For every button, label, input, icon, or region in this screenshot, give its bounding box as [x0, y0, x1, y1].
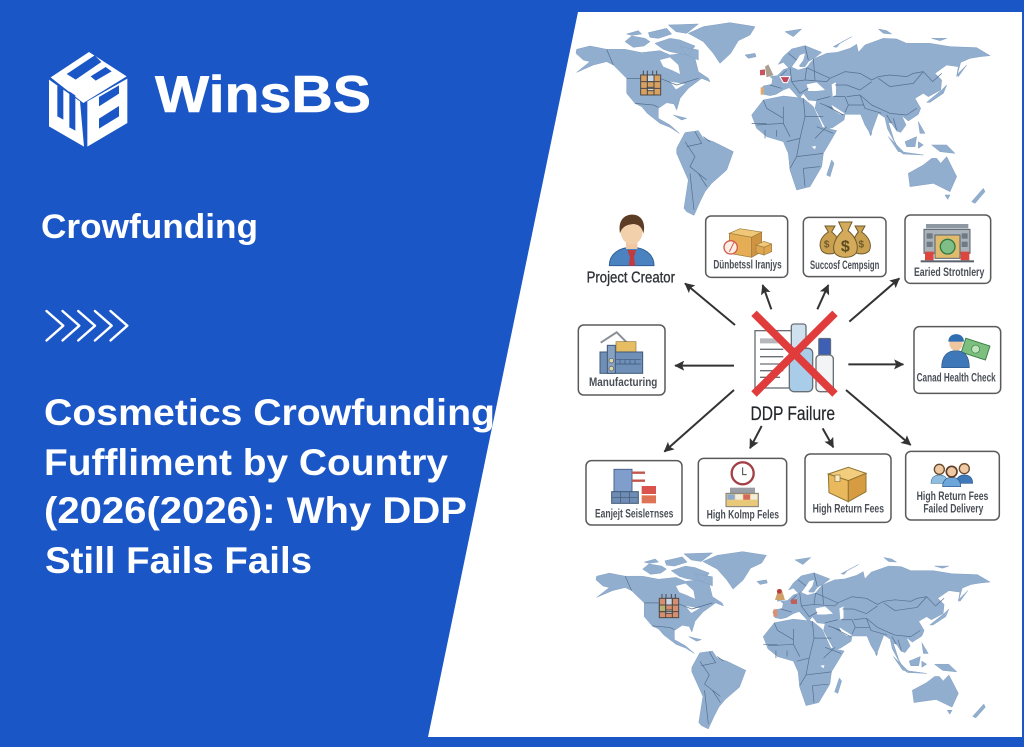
box: successful campaign: $: [841, 239, 850, 256]
icon: center cosmetics with red X: [754, 313, 835, 394]
box: high return fees: [805, 454, 891, 522]
arrow: to strategy: [849, 278, 899, 322]
box: successful campaign: Succosf Cempsign: [810, 259, 879, 272]
arrow: to box one: [664, 390, 734, 452]
panel: white slanted panel: [428, 12, 1022, 737]
headline: (2026(2026): Why DDP: [44, 490, 467, 531]
arrow: to box two: [750, 426, 762, 448]
box: earlier strategy: [905, 215, 991, 283]
box: canada health check: [914, 327, 1001, 393]
box: manufacturing: Manufacturing: [589, 376, 657, 389]
box: manufacturing: [578, 325, 665, 395]
map: top world map: [576, 23, 990, 215]
diagram: upper half: [578, 215, 1001, 395]
box: high customs fees: High Kolmp Feles: [707, 509, 779, 522]
arrow: to box four: [846, 390, 911, 445]
label: DDP failure: DDP Failure: [750, 404, 835, 425]
map: bottom world map: [596, 552, 990, 729]
box: successful campaign: $: [859, 240, 865, 251]
label: project creator: Project Creator: [587, 270, 675, 287]
arrow: to campaign: [817, 285, 828, 309]
box: earlier sales: [586, 461, 682, 525]
icon: bottom map markers: [659, 589, 797, 618]
box: successful campaign: [803, 217, 886, 277]
box: failed delivery: [906, 451, 999, 520]
icon: chevrons: [46, 311, 127, 340]
icon: project creator: [609, 215, 654, 266]
box: failed delivery: High Return Fees: [917, 490, 988, 503]
headline: Fuffliment by Country: [44, 442, 448, 483]
arrow: to shipments: [763, 285, 771, 309]
box: successful campaign: $: [824, 240, 830, 251]
category label: Crowfunding: [41, 208, 258, 246]
headline: Cosmetics Crowfunding: [44, 392, 495, 433]
brand name: WinsBS: [155, 66, 371, 124]
box: shipments: [706, 216, 788, 277]
icon: top map warehouse grid: [641, 64, 790, 95]
arrow: to manufacturing: [675, 363, 734, 369]
box: shipments: Dünbetssl Iranjys: [713, 258, 782, 271]
headline: [44, 392, 495, 581]
headline: Still Fails Fails: [45, 540, 312, 581]
diagram: lower half: [586, 390, 999, 526]
box: high return fees: High Return Fees: [813, 502, 884, 515]
box: earlier sales: Eanjejt Seisleтnses: [595, 507, 673, 520]
arrow: to box three: [823, 428, 833, 447]
box: high customs fees: [698, 458, 787, 526]
box: failed delivery: Failed Delivery: [923, 503, 984, 516]
arrow: to project creator: [685, 283, 735, 325]
logo: WinsBS cube: [49, 52, 127, 147]
arrow: to health check: [848, 361, 903, 367]
box: earlier strategy: Earied Strotnlery: [914, 266, 985, 279]
